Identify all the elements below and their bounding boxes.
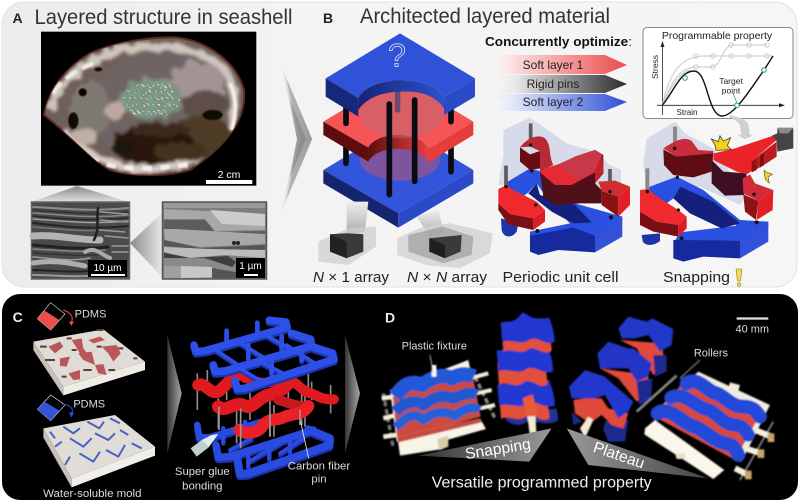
connector triangle to left micrograph (31, 186, 129, 202)
middle tier (497, 340, 553, 386)
bottom tier (497, 374, 558, 437)
arrow with label: snapping (418, 428, 552, 463)
spark icon (711, 136, 731, 150)
bottom blue plate (323, 125, 473, 228)
chart: programmable property (643, 28, 793, 118)
micrograph left: 10 µm (32, 202, 130, 279)
exploded unit: blue, red, blue plates with pins (323, 33, 475, 228)
panel letter C: C (13, 309, 23, 325)
label plastic fixture: Plastic fixture (402, 340, 467, 352)
connector triangle to right micrograph (130, 213, 162, 277)
bottom blue frame (197, 417, 330, 476)
scale bar 40 mm (736, 317, 769, 335)
front tier (569, 370, 633, 442)
N by 1 array icon (318, 202, 376, 265)
grey posts (647, 127, 675, 190)
scale label 2 cm: 2 cm (218, 169, 241, 181)
axis label: strain: Strain (677, 108, 697, 117)
target point label: point (722, 86, 741, 96)
carbon fiber pins (197, 370, 331, 448)
caption: versatile programmed property: Versatile programmed property (432, 474, 652, 491)
label PDMS blue: PDMS (73, 398, 105, 410)
bar: soft layer 2: Soft layer 2 (523, 95, 584, 109)
label PDMS red: PDMS (75, 309, 106, 321)
photo: snapping tower (497, 312, 558, 437)
spark icon small (764, 170, 773, 183)
pin holes (646, 147, 759, 240)
arrow with label: snapping: Snapping (464, 436, 532, 463)
ghost centre pin (390, 92, 406, 110)
leader line (301, 422, 309, 458)
panel A: layered structure in seashell (12, 6, 292, 279)
panel C: fabrication (13, 303, 360, 500)
water-soluble mold with blue pattern (43, 415, 155, 487)
green target markers (683, 68, 766, 108)
axes (657, 42, 782, 115)
icon: red beaker pouring (37, 303, 74, 330)
question mark: ? (388, 38, 406, 74)
top blue plate (326, 33, 475, 117)
black snapping curve (662, 56, 773, 116)
arrow with label: plateau (567, 428, 708, 478)
arrow triangle 2 (345, 335, 360, 453)
scale bar: 2 cm (206, 180, 252, 184)
central iridescent patch (121, 78, 182, 119)
target leader (733, 93, 737, 103)
panel letter B: B (323, 10, 333, 26)
chevron arrow from A to B (281, 64, 312, 214)
top tier (501, 312, 555, 352)
grey posts (506, 123, 610, 192)
arrow triangle 1 (167, 335, 182, 453)
axis label: stress: Stress (650, 55, 660, 79)
scale box 10 µm: 10 µm (94, 263, 122, 274)
rear tier (618, 317, 673, 377)
translucent ghost region (643, 122, 747, 205)
panel: bottom black background C and D (2, 294, 798, 500)
middle tier (597, 342, 652, 405)
label super glue bonding: bonding (182, 480, 222, 492)
red middle layer (198, 375, 334, 433)
heading A: Layered structure in seashell (34, 6, 292, 29)
heading: concurrently optimize: Concurrently optimize : (485, 34, 632, 49)
label water-soluble mold: Water-soluble mold (43, 488, 141, 500)
red layer (498, 136, 630, 230)
translucent ghost region (498, 118, 621, 188)
blue layer (640, 177, 768, 262)
periodic unit cell (498, 118, 630, 255)
scale bar 40 mm: 40 mm (736, 323, 769, 335)
pin holes (504, 143, 613, 233)
icon: blue beaker pouring (37, 395, 74, 421)
grey target markers (694, 43, 769, 69)
bar: soft layer 1: Soft layer 1 (523, 58, 584, 72)
grey loading clamp (772, 128, 793, 152)
top blue frame (194, 320, 334, 391)
pearl flecks (53, 63, 235, 168)
dark pits (79, 88, 87, 96)
scale box 1 µm: 1 µm (239, 261, 262, 272)
N by N array icon (397, 210, 493, 268)
grey alternative curves (662, 45, 773, 105)
panel letter A: A (12, 10, 23, 26)
water-soluble mold with red pattern (33, 329, 145, 395)
bar: rigid pins: Rigid pins (527, 77, 579, 91)
panel letter D: D (385, 310, 395, 326)
arrow with label: plateau: Plateau (591, 439, 647, 472)
grey curved arrow from chart (730, 115, 753, 139)
photo: left flat sample with plastic fixture (382, 355, 495, 456)
rear pins lower (346, 143, 451, 172)
blue layer (501, 168, 622, 255)
front pins over red (219, 407, 300, 447)
chart title: Programmable property (662, 30, 773, 42)
exploded lattice (191, 320, 334, 476)
panel: top background A and B (2, 2, 797, 287)
front pins (389, 100, 415, 195)
heading B: Architected layered material (360, 5, 610, 28)
panel B: architected layered material (313, 5, 793, 286)
photo: right flat sample with rollers (637, 360, 774, 480)
icon: exclamation mark (736, 269, 742, 286)
label N x N array: N × N array (407, 269, 488, 286)
pearly outer rim (50, 47, 234, 128)
snapping unit cell (640, 115, 793, 262)
rear pins upper (346, 102, 451, 123)
photo: plateau tower (569, 317, 673, 442)
red plate (323, 77, 473, 162)
red layer (640, 136, 777, 237)
label N x 1 array: N × 1 array (313, 269, 390, 286)
bar: rigid pins (480, 75, 627, 93)
label rollers: Rollers (694, 347, 729, 359)
photo: abalone shell (41, 32, 256, 186)
bar: soft layer 1 (480, 55, 627, 74)
glue bottle (191, 434, 218, 457)
target point label: Target (719, 76, 743, 86)
label carbon fiber pin: Carbon fiber (288, 460, 350, 472)
inner bowl (100, 50, 232, 150)
label carbon fiber pin: pin (311, 474, 327, 486)
micrograph right: 1 µm (162, 202, 266, 279)
panel D letter, labels and scale (385, 310, 769, 359)
label super glue bonding: Super glue (175, 466, 230, 478)
label periodic unit cell: Periodic unit cell (502, 269, 618, 286)
bar: soft layer 2 (480, 94, 627, 111)
label snapping: Snapping (663, 269, 730, 286)
